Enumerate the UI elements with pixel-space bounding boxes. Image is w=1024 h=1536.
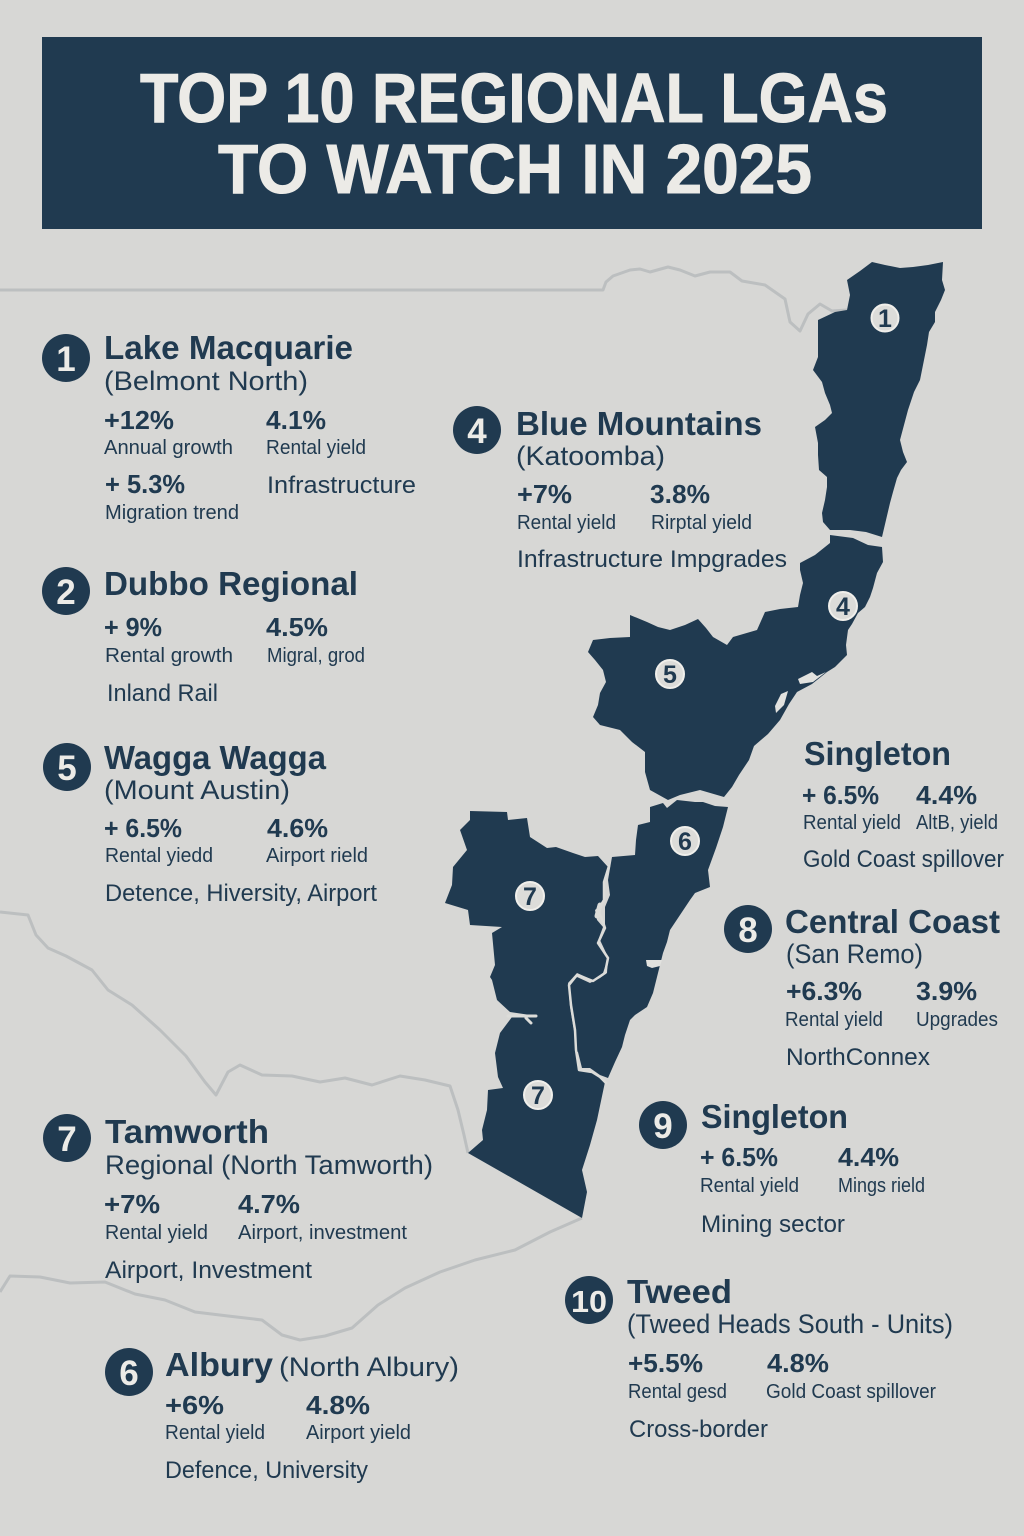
- panel: 1 Lake Macquarie: 1: [56, 340, 76, 379]
- panel: 5 Wagga Wagga: + 6.5%: [104, 813, 182, 843]
- map inlet: [646, 960, 662, 968]
- map marker 7 south: [524, 1081, 552, 1110]
- title banner: TO WATCH IN 2025: [218, 130, 812, 208]
- panel: 5 Wagga Wagga: (Mount Austin): [104, 775, 290, 805]
- panel: 4 Blue Mountains: (Katoomba): [516, 441, 665, 471]
- panel: 10 Tweed: +5.5%: [628, 1348, 703, 1378]
- panel: 4 Blue Mountains: 3.8%: [650, 479, 710, 509]
- panel: 5 Wagga Wagga: 4.6%: [267, 813, 328, 843]
- panel: 10 Tweed: (Tweed Heads South - Units): [627, 1309, 953, 1339]
- panel: 9 Singleton: Singleton: [701, 1098, 848, 1135]
- panel: Singleton (upper): + 6.5%: [802, 780, 879, 810]
- panel: 4 Blue Mountains: [453, 405, 787, 573]
- panel: 1 Lake Macquarie: Lake Macquarie: [104, 329, 353, 366]
- panel: 10 Tweed: 4.8%: [767, 1348, 829, 1378]
- map of regional areas: [445, 262, 945, 1218]
- map region: central coast LGA: [588, 535, 883, 800]
- panel: 10 Tweed: Rental gesd: [628, 1381, 727, 1403]
- panel: 8 Central Coast: (San Remo): [786, 939, 923, 969]
- map marker 5: [656, 660, 684, 689]
- map marker 6: [671, 827, 699, 856]
- panel: 7 Tamworth: [43, 1113, 433, 1284]
- panel: 7 Tamworth: Regional (North Tamworth): [105, 1150, 433, 1180]
- panel: 2 Dubbo Regional: Migral, grod: [267, 645, 365, 667]
- panel: 1 Lake Macquarie: +12%: [104, 405, 174, 435]
- panel: Singleton (upper): Gold Coast spillover: [803, 846, 1004, 873]
- panel: 4 Blue Mountains: Infrastructure Impgrades: [517, 546, 787, 573]
- panel: 4 Blue Mountains: 4: [467, 412, 487, 451]
- map region: Tamworth LGA: [445, 811, 608, 1218]
- panel: 2 Dubbo Regional: 2: [56, 573, 76, 612]
- panel: 9 Singleton: 4.4%: [838, 1142, 899, 1172]
- panel: 7 Tamworth: Rental yield: [105, 1222, 208, 1244]
- map region: northern LGA: [813, 262, 945, 537]
- panel: 5 Wagga Wagga: Wagga Wagga: [104, 739, 327, 776]
- panel: 2 Dubbo Regional: + 9%: [104, 612, 162, 642]
- panel: Singleton (upper): 4.4%: [916, 780, 977, 810]
- panel: Singleton (upper): Singleton: [804, 735, 951, 772]
- panel: 5 Wagga Wagga: 5: [57, 749, 77, 788]
- panel: 1 Lake Macquarie: [42, 329, 416, 524]
- panel: 1 Lake Macquarie: Annual growth: [104, 437, 233, 459]
- panel: 9 Singleton: [639, 1098, 925, 1238]
- title banner: TOP 10 REGIONAL LGAs: [140, 59, 888, 137]
- panel: 1 Lake Macquarie: 4.1%: [266, 405, 326, 435]
- panel: 7 Tamworth: Airport, investment: [238, 1222, 407, 1244]
- panel: 10 Tweed: Tweed: [627, 1273, 732, 1310]
- panel: 6 Albury: 4.8%: [306, 1390, 370, 1420]
- panel: 8 Central Coast: 8: [738, 911, 758, 950]
- map region: mid-coast LGA: [568, 800, 728, 1078]
- panel: 5 Wagga Wagga: Airport rield: [266, 845, 368, 867]
- panel: 7 Tamworth: Tamworth: [105, 1113, 269, 1150]
- panel: 9 Singleton: Mining sector: [701, 1211, 845, 1238]
- title banner: [42, 37, 982, 229]
- map rivers: [508, 866, 609, 1083]
- panel: 9 Singleton: Mings rield: [838, 1175, 925, 1197]
- map marker 1: [872, 304, 898, 333]
- panel: 5 Wagga Wagga: Rental yiedd: [105, 845, 213, 867]
- panel: 4 Blue Mountains: Rirptal yield: [651, 512, 752, 534]
- panel: 2 Dubbo Regional: Inland Rail: [107, 680, 218, 707]
- panel: 2 Dubbo Regional: Rental growth: [105, 645, 233, 667]
- panel: 8 Central Coast: Central Coast: [785, 903, 1000, 940]
- panel: 5 Wagga Wagga: [43, 739, 377, 907]
- panel: 9 Singleton: + 6.5%: [700, 1142, 778, 1172]
- map marker 4: [829, 592, 857, 621]
- panel: 4 Blue Mountains: +7%: [517, 479, 572, 509]
- panel: 7 Tamworth: +7%: [104, 1189, 160, 1219]
- panel: 1 Lake Macquarie: Infrastructure: [267, 472, 416, 499]
- panel: 10 Tweed: [565, 1273, 953, 1443]
- map marker 1: 1: [878, 305, 892, 333]
- map marker 7 south: 7: [531, 1082, 545, 1110]
- panel: 6 Albury: 6: [119, 1354, 139, 1393]
- panel: 10 Tweed: 10: [571, 1284, 607, 1319]
- panel: 1 Lake Macquarie: (Belmont North): [104, 366, 308, 396]
- panel: 4 Blue Mountains: Rental yield: [517, 512, 616, 534]
- map estuaries: [775, 672, 826, 713]
- panel: 8 Central Coast: [724, 903, 1000, 1071]
- panel: 8 Central Coast: NorthConnex: [786, 1044, 930, 1071]
- panel: 7 Tamworth: 7: [57, 1120, 77, 1159]
- panel: 6 Albury: (North Albury): [279, 1352, 459, 1382]
- map marker 5: 5: [663, 661, 677, 689]
- panel: 2 Dubbo Regional: Dubbo Regional: [104, 565, 358, 602]
- panel: 6 Albury: [105, 1346, 459, 1484]
- map marker 7 north: 7: [523, 883, 537, 911]
- panel: 6 Albury: Albury: [165, 1346, 274, 1383]
- panel: 6 Albury: Rental yield: [165, 1422, 265, 1444]
- panel: 1 Lake Macquarie: Rental yield: [266, 437, 366, 459]
- panel: Singleton (upper): [802, 735, 1004, 873]
- panel: 9 Singleton: 9: [653, 1107, 673, 1146]
- panel: 9 Singleton: Rental yield: [700, 1175, 799, 1197]
- panel: 8 Central Coast: Rental yield: [785, 1009, 883, 1031]
- panel: 6 Albury: +6%: [165, 1390, 224, 1420]
- panel: 6 Albury: Airport yield: [306, 1422, 411, 1444]
- panel: 7 Tamworth: 4.7%: [238, 1189, 300, 1219]
- panel: 5 Wagga Wagga: Detence, Hiversity, Airport: [105, 880, 377, 907]
- panel: 8 Central Coast: Upgrades: [916, 1009, 998, 1031]
- panel: 7 Tamworth: Airport, Investment: [105, 1257, 312, 1284]
- panel: 8 Central Coast: 3.9%: [916, 976, 977, 1006]
- panel: 1 Lake Macquarie: + 5.3%: [105, 469, 185, 499]
- map marker 4: 4: [836, 593, 850, 621]
- panel: 8 Central Coast: +6.3%: [786, 976, 862, 1006]
- panel: 10 Tweed: Cross-border: [629, 1416, 768, 1443]
- panel: 2 Dubbo Regional: [42, 565, 365, 707]
- panel: 2 Dubbo Regional: 4.5%: [266, 612, 328, 642]
- panel: Singleton (upper): AltB, yield: [916, 812, 998, 834]
- map marker 6: 6: [678, 828, 692, 856]
- panel: 4 Blue Mountains: Blue Mountains: [516, 405, 762, 442]
- map marker 7 north: [516, 882, 544, 911]
- panel: 10 Tweed: Gold Coast spillover: [766, 1381, 936, 1403]
- panel: 6 Albury: Defence, University: [165, 1457, 368, 1484]
- state border lines: [0, 267, 847, 1340]
- panel: 1 Lake Macquarie: Migration trend: [105, 502, 239, 524]
- panel: Singleton (upper): Rental yield: [803, 812, 901, 834]
